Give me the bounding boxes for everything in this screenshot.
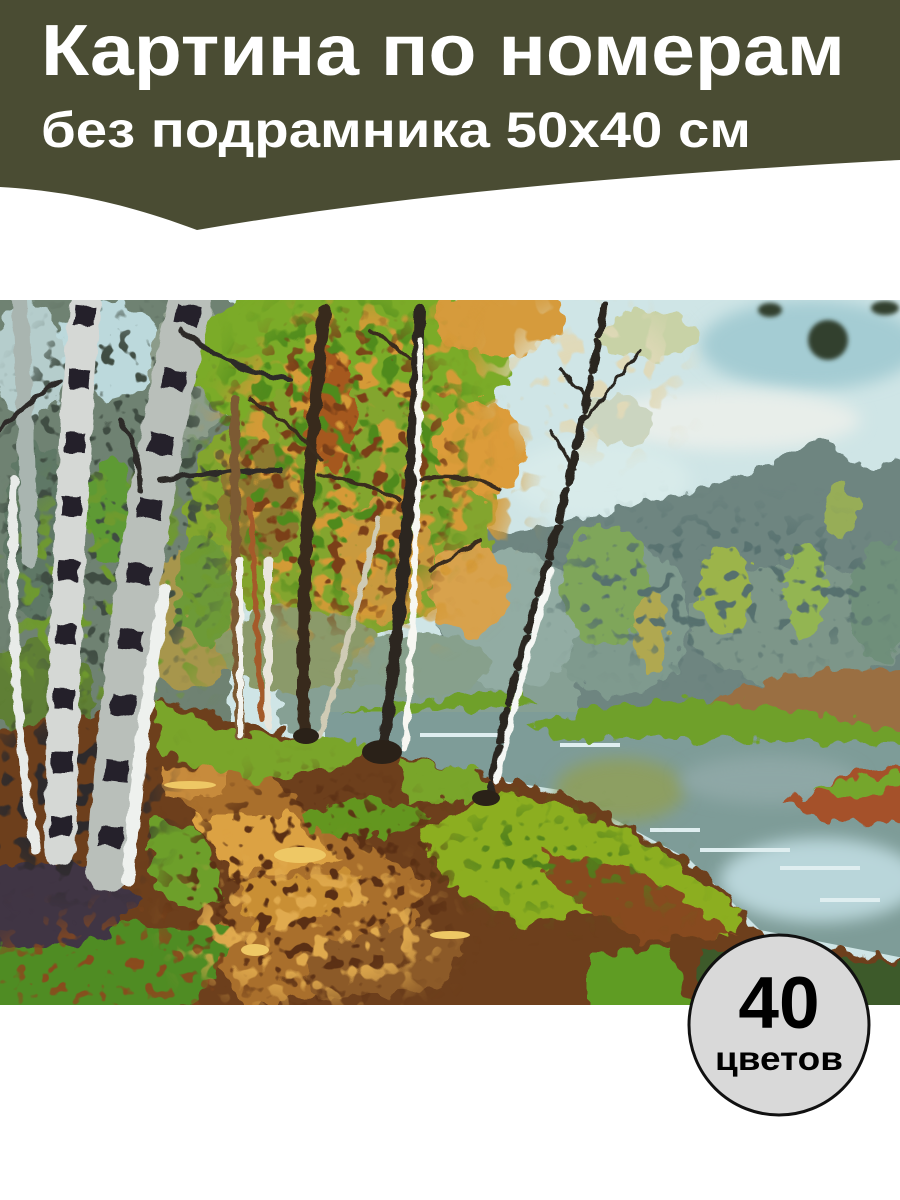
- tree bases: [293, 728, 500, 806]
- central foliage: [177, 275, 700, 697]
- badge label: цветов: [715, 1040, 843, 1077]
- title: Картина по номерам: [41, 11, 845, 91]
- badge number: 40: [738, 963, 820, 1044]
- upper right branch leaves: [758, 301, 899, 360]
- river islands: [340, 668, 900, 825]
- sky: [226, 300, 900, 963]
- forest ground and path: [0, 700, 900, 1040]
- header banner: [0, 0, 900, 230]
- river: [325, 712, 900, 965]
- badge: 40 colours: [689, 935, 869, 1115]
- centre birch trunks: [235, 310, 500, 755]
- painting: birch forest by a river: [0, 275, 900, 1040]
- subtitle: без подрамника 50х40 см: [41, 102, 751, 158]
- birch trees: [0, 300, 640, 880]
- ground mottling: [0, 710, 700, 1020]
- left birch grove background: [0, 300, 243, 732]
- leaning birch by the river: [490, 305, 640, 795]
- sunlit path highlights: [164, 781, 470, 956]
- distant forest: [280, 440, 900, 730]
- left birch trunks: [0, 300, 290, 880]
- foliage mottling: [0, 300, 890, 720]
